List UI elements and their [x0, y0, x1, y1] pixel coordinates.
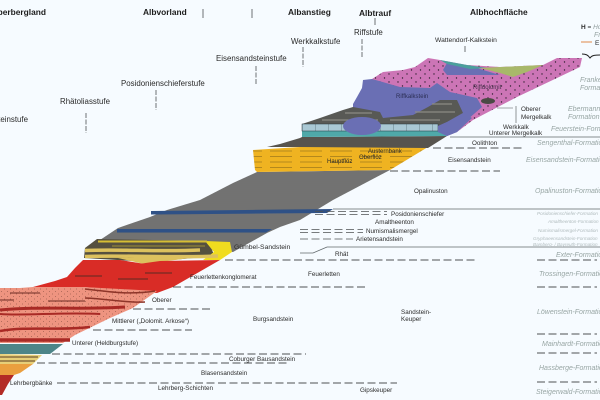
- detail: dark lens in dolomite: [481, 98, 495, 104]
- formation names column: [526, 77, 600, 396]
- layer: Riffkalk right lens: [438, 113, 472, 136]
- label: Blasensandstein: Blasensandstein: [201, 370, 248, 377]
- layer: Opalinuston grey: [97, 170, 390, 252]
- label: Gümbel-Sandstein: Gümbel-Sandstein: [234, 244, 291, 251]
- layer: Gümbel-Sandstein yellow: [203, 241, 232, 260]
- label: Mittlerer: Mittlerer („Dolomit. Arkose“): [112, 318, 189, 325]
- label: Numismalismergel: Numismalismergel: [366, 228, 418, 235]
- heading: Albvorland: Albvorland: [143, 7, 187, 17]
- label: Oberer Mergelkalk: Oberer: [521, 106, 541, 113]
- formation: Posidonienschiefer: Posidonienschiefer-Formation: [537, 211, 598, 216]
- label: Austernbank: Austernbank: [368, 149, 403, 155]
- layer: Burgsandstein salmon: [0, 287, 157, 343]
- label: Feuerletten: Feuerletten: [308, 271, 340, 278]
- heading: Albtrauf: Albtrauf: [359, 8, 391, 18]
- layer: Coburger yellow band: [0, 354, 42, 364]
- layer: Rhät dark base: [84, 239, 215, 262]
- formation names column: Formation: [568, 114, 600, 121]
- formation: Amaltheenton: Amaltheenton-Formation: [547, 219, 599, 224]
- dashed lines: [37, 148, 597, 383]
- heading: Albhochfläche: Albhochfläche: [470, 7, 528, 17]
- formation: Gryphaeensandstein: Gryphaeensandstein-Formation: [533, 236, 598, 241]
- legend: bracket: [582, 54, 600, 58]
- label: Posidonienschiefer: Posidonienschiefer: [391, 211, 444, 218]
- solid formation lines: [300, 137, 600, 253]
- layer: Eisensandstein gold: [253, 147, 428, 172]
- label: Werkkalk: Werkkalk: [503, 124, 530, 131]
- label: Opalinuston: Opalinuston: [414, 188, 448, 195]
- label: Unterer Mergelkalk: Unterer Mergelkalk: [489, 130, 543, 137]
- formation: Bamberg / Bayreuth: Bamberg- / Bayreuth-Formation: [533, 242, 598, 247]
- legend fragment: [581, 24, 600, 58]
- label: Riffdolomit: Riffdolomit: [473, 85, 502, 91]
- legend: E: E: [595, 40, 600, 47]
- label: Coburger Bausandstein: Coburger Bausandstein: [229, 356, 296, 363]
- stratigraphic unit names: Mergelkalk: [521, 114, 552, 121]
- label: Feuerlettenkonglomerat: Feuerlettenkonglomerat: [190, 274, 257, 281]
- label: Oberer: Oberer: [152, 297, 172, 304]
- scarp names: [0, 28, 497, 124]
- layer: Blasensandstein orange: [0, 364, 33, 375]
- layer: Jurassic dark marls: [302, 100, 463, 126]
- label: Arietensandstein: Arietensandstein: [356, 236, 403, 243]
- label: Wattendorf-Kalkstein: Wattendorf-Kalkstein: [435, 37, 497, 44]
- label: Werkkalkstufe: Werkkalkstufe: [291, 37, 341, 46]
- label: Lehrbergbänke: Lehrbergbänke: [10, 380, 53, 387]
- layer: Riffkalk lens: [343, 117, 381, 135]
- label: Posidonienschieferstufe: Posidonienschieferstufe: [121, 79, 205, 88]
- layer: Rhät beige bands: [85, 242, 218, 257]
- heading: Albanstieg: Albanstieg: [288, 7, 331, 17]
- label: Amaltheenton: Amaltheenton: [375, 219, 414, 226]
- stratigraphic unit names: [10, 85, 552, 394]
- label: Gipskeuper: Gipskeuper: [360, 387, 392, 394]
- label: Rhätoliasstufe: Rhätoliasstufe: [60, 97, 111, 106]
- label: Hauptflöz: Hauptflöz: [327, 159, 352, 165]
- legend: orange line: [581, 41, 592, 43]
- detail: Burgsandstein red seams: [0, 289, 155, 340]
- label: Eisensandsteinstufe: Eisensandsteinstufe: [216, 54, 287, 63]
- strata boundary lines: [37, 106, 600, 383]
- label: Sandstein-Keuper: Sandstein-: [401, 309, 431, 316]
- label: Rhät: Rhät: [335, 251, 349, 258]
- stratigraphic unit names: Keuper: [401, 316, 421, 323]
- layer: teal cap: [440, 60, 487, 69]
- label: Burgsandstein: Burgsandstein: [253, 316, 294, 323]
- region ticks and step leader lines: [86, 9, 465, 133]
- layer: Feuerletten red: [33, 260, 220, 293]
- label: Riffkalkstein: Riffkalkstein: [396, 94, 428, 100]
- layer: Feuerstein teal: [302, 131, 447, 137]
- layer: green-yellow cover: [480, 65, 543, 77]
- label: Lehrberg-Schichten: Lehrberg-Schichten: [158, 385, 213, 392]
- layer: Rhät sand lens: [118, 258, 190, 264]
- landscape headings: [0, 7, 528, 18]
- layer: teal mudstone: [0, 344, 63, 354]
- layer: small blue reef: [443, 63, 500, 75]
- label: Oolithton: Oolithton: [472, 140, 498, 147]
- label: Oberflöz: Oberflöz: [359, 155, 382, 161]
- layer: Riffkalk blue: [353, 79, 482, 136]
- label: Eisensandstein: Eisensandstein: [448, 157, 491, 164]
- layer: Werkkalk blue-grey blocks: [302, 124, 438, 131]
- layer: Lehrberg dark red: [0, 375, 14, 395]
- layer: Riffdolomit pink: [370, 58, 582, 136]
- label: Riffstufe: Riffstufe: [354, 28, 383, 37]
- label: Unterer (Heldburgstufe): Unterer (Heldburgstufe): [72, 340, 138, 347]
- detail: Feuerletten conglomerate seams: [75, 273, 172, 279]
- detail: marl light beds: [322, 104, 455, 120]
- layer: Sengenthal dark band: [267, 136, 447, 148]
- layer: Posidonienschiefer blue bands: [117, 209, 333, 232]
- formation: Numismalismergel: Numismalismergel-Formation: [538, 228, 598, 233]
- Mergelkalk bracket lines: [497, 106, 516, 123]
